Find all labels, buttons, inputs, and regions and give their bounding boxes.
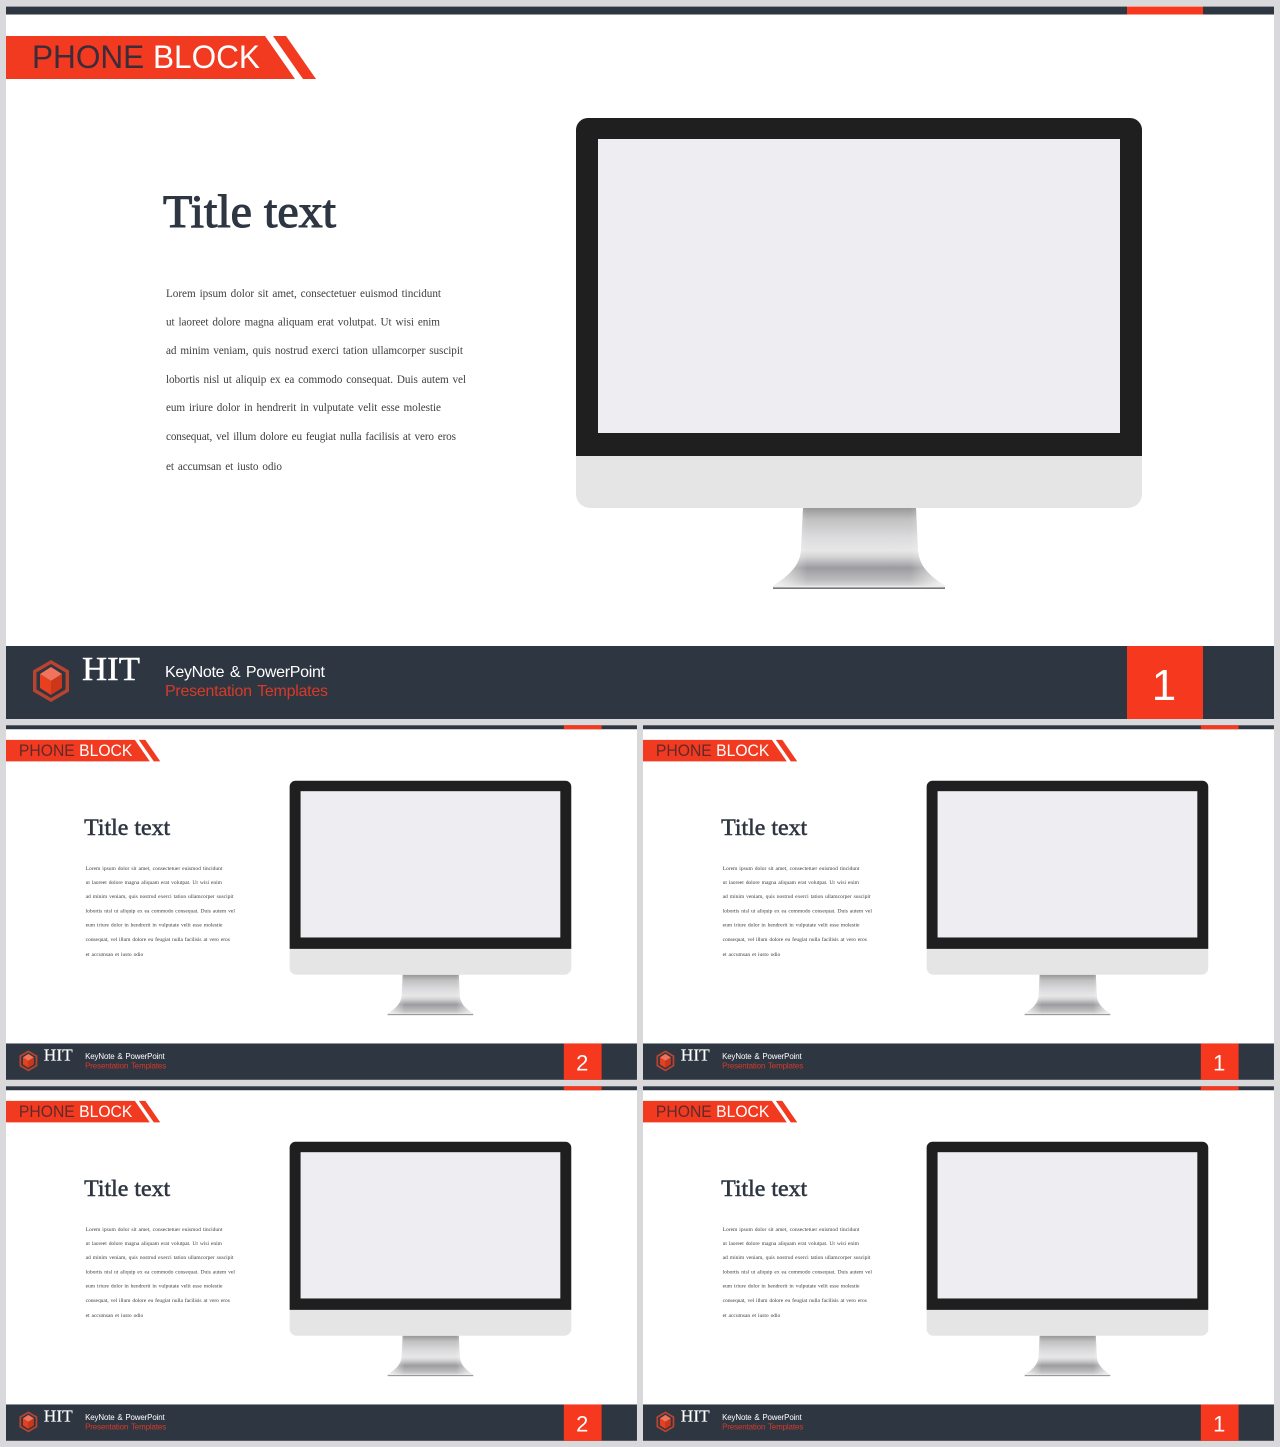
top bar xyxy=(6,6,1274,14)
body text: Lorem ipsum dolor sit amet, consectetuer euismod tincidunt xyxy=(86,866,223,872)
body text: et accumsan et iusto odio xyxy=(86,952,144,958)
body text: eum iriure dolor in hendrerit in vulputate velit esse molestie xyxy=(86,923,223,929)
footer bar xyxy=(6,1043,637,1080)
icon: hexagon cube logo xyxy=(33,660,69,702)
monitor illustration xyxy=(290,781,571,1015)
body text xyxy=(86,1227,235,1319)
footer tagline: Presentation Templates xyxy=(722,1422,803,1431)
body text: eum iriure dolor in hendrerit in vulputate velit esse molestie xyxy=(723,923,860,929)
heading banner: PHONE BLOCK xyxy=(6,740,160,761)
page number: 1 xyxy=(1213,1411,1225,1436)
body text: ut laoreet dolore magna aliquam erat volutpat. Ut wisi enim xyxy=(723,880,860,886)
body text: Lorem ipsum dolor sit amet, consectetuer euismod tincidunt xyxy=(723,866,860,872)
footer tagline xyxy=(722,1052,803,1070)
monitor illustration xyxy=(290,1142,571,1376)
heading banner: PHONE BLOCK: PHONE BLOCK xyxy=(656,1103,770,1121)
top bar xyxy=(643,725,1274,729)
body text: ut laoreet dolore magna aliquam erat volutpat. Ut wisi enim xyxy=(166,316,440,328)
body text: et accumsan et iusto odio xyxy=(86,1313,144,1319)
footer bar xyxy=(6,646,1274,719)
panel: small slide 1 xyxy=(643,725,1274,1080)
body text xyxy=(166,288,466,473)
heading banner: PHONE BLOCK xyxy=(6,36,316,79)
footer tagline: KeyNote & PowerPoint xyxy=(85,1052,166,1061)
title: Title text xyxy=(84,1176,171,1202)
heading banner: PHONE BLOCK: PHONE BLOCK xyxy=(656,742,770,760)
body text: eum iriure dolor in hendrerit in vulputate velit esse molestie xyxy=(166,402,441,414)
body text: ad minim veniam, quis nostrud exerci tation ullamcorper suscipit xyxy=(723,1255,871,1261)
heading banner: PHONE BLOCK: PHONE BLOCK xyxy=(32,39,260,75)
body text: Lorem ipsum dolor sit amet, consectetuer euismod tincidunt xyxy=(723,1227,860,1233)
logo wordmark: HIT xyxy=(44,1045,73,1064)
title: Title text xyxy=(721,815,808,841)
body text: consequat, vel illum dolore eu feugiat nulla facilisis at vero eros xyxy=(723,1297,867,1304)
heading banner: PHONE BLOCK xyxy=(643,1101,797,1122)
body text: consequat, vel illum dolore eu feugiat nulla facilisis at vero eros xyxy=(86,936,230,943)
body text: lobortis nisl ut aliquip ex ea commodo consequat. Duis autem vel xyxy=(723,909,872,915)
title: Title text xyxy=(721,1176,808,1202)
body text: ad minim veniam, quis nostrud exerci tation ullamcorper suscipit xyxy=(723,894,871,900)
footer tagline: KeyNote & PowerPoint xyxy=(85,1413,166,1422)
body text: lobortis nisl ut aliquip ex ea commodo consequat. Duis autem vel xyxy=(86,1270,235,1276)
body text: Lorem ipsum dolor sit amet, consectetuer euismod tincidunt xyxy=(86,1227,223,1233)
title: Title text xyxy=(163,186,336,238)
body text: eum iriure dolor in hendrerit in vulputate velit esse molestie xyxy=(723,1284,860,1290)
top bar xyxy=(643,1086,1274,1090)
top bar xyxy=(6,725,637,729)
heading banner: PHONE BLOCK: PHONE BLOCK xyxy=(19,1103,133,1121)
logo wordmark: HIT xyxy=(44,1406,73,1425)
footer tagline xyxy=(165,664,328,700)
body text: lobortis nisl ut aliquip ex ea commodo consequat. Duis autem vel xyxy=(723,1270,872,1276)
body text: ad minim veniam, quis nostrud exerci tation ullamcorper suscipit xyxy=(166,345,464,357)
footer tagline: Presentation Templates xyxy=(165,683,328,700)
footer tagline: KeyNote & PowerPoint xyxy=(722,1413,803,1422)
footer bar xyxy=(6,1404,637,1441)
page number: 1 xyxy=(1213,1050,1225,1075)
panel: main slide 1 xyxy=(6,6,1274,719)
logo wordmark: HIT xyxy=(681,1045,710,1064)
icon: hexagon cube logo xyxy=(19,1050,37,1071)
top bar xyxy=(6,1086,637,1090)
monitor illustration xyxy=(927,781,1208,1015)
body text: lobortis nisl ut aliquip ex ea commodo consequat. Duis autem vel xyxy=(166,374,466,386)
footer tagline: Presentation Templates xyxy=(722,1061,803,1070)
body text: ut laoreet dolore magna aliquam erat volutpat. Ut wisi enim xyxy=(86,880,223,886)
body text xyxy=(723,1227,872,1319)
body text: ut laoreet dolore magna aliquam erat volutpat. Ut wisi enim xyxy=(723,1241,860,1247)
footer bar xyxy=(643,1043,1274,1080)
body text: Lorem ipsum dolor sit amet, consectetuer euismod tincidunt xyxy=(166,288,442,300)
body text: consequat, vel illum dolore eu feugiat nulla facilisis at vero eros xyxy=(723,936,867,943)
footer tagline: Presentation Templates xyxy=(85,1061,166,1070)
icon: hexagon cube logo xyxy=(656,1411,674,1432)
footer tagline xyxy=(85,1413,166,1431)
title: Title text xyxy=(84,815,171,841)
body text: ad minim veniam, quis nostrud exerci tation ullamcorper suscipit xyxy=(86,1255,234,1261)
body text xyxy=(723,866,872,958)
body text: ut laoreet dolore magna aliquam erat volutpat. Ut wisi enim xyxy=(86,1241,223,1247)
body text xyxy=(86,866,235,958)
footer tagline: KeyNote & PowerPoint xyxy=(165,664,326,681)
heading banner: PHONE BLOCK xyxy=(643,740,797,761)
heading banner: PHONE BLOCK xyxy=(6,1101,160,1122)
body text: lobortis nisl ut aliquip ex ea commodo consequat. Duis autem vel xyxy=(86,909,235,915)
footer tagline: Presentation Templates xyxy=(85,1422,166,1431)
page number: 2 xyxy=(576,1411,588,1436)
body text: et accumsan et iusto odio xyxy=(166,461,282,473)
heading banner: PHONE BLOCK: PHONE BLOCK xyxy=(19,742,133,760)
body text: eum iriure dolor in hendrerit in vulputate velit esse molestie xyxy=(86,1284,223,1290)
monitor illustration xyxy=(927,1142,1208,1376)
footer tagline: KeyNote & PowerPoint xyxy=(722,1052,803,1061)
body text: ad minim veniam, quis nostrud exerci tation ullamcorper suscipit xyxy=(86,894,234,900)
footer bar xyxy=(643,1404,1274,1441)
page number: 2 xyxy=(576,1050,588,1075)
footer tagline xyxy=(722,1413,803,1431)
panel: small slide 2 xyxy=(6,725,637,1080)
logo wordmark: HIT xyxy=(82,651,140,688)
body text: consequat, vel illum dolore eu feugiat nulla facilisis at vero eros xyxy=(166,431,456,443)
body text: consequat, vel illum dolore eu feugiat nulla facilisis at vero eros xyxy=(86,1297,230,1304)
monitor illustration xyxy=(576,118,1142,589)
panel: small slide 1 lower xyxy=(643,1086,1274,1441)
page number: 1 xyxy=(1152,661,1176,710)
logo wordmark: HIT xyxy=(681,1406,710,1425)
body text: et accumsan et iusto odio xyxy=(723,952,781,958)
icon: hexagon cube logo xyxy=(656,1050,674,1071)
panel: small slide 2 lower xyxy=(6,1086,637,1441)
icon: hexagon cube logo xyxy=(19,1411,37,1432)
body text: et accumsan et iusto odio xyxy=(723,1313,781,1319)
footer tagline xyxy=(85,1052,166,1070)
